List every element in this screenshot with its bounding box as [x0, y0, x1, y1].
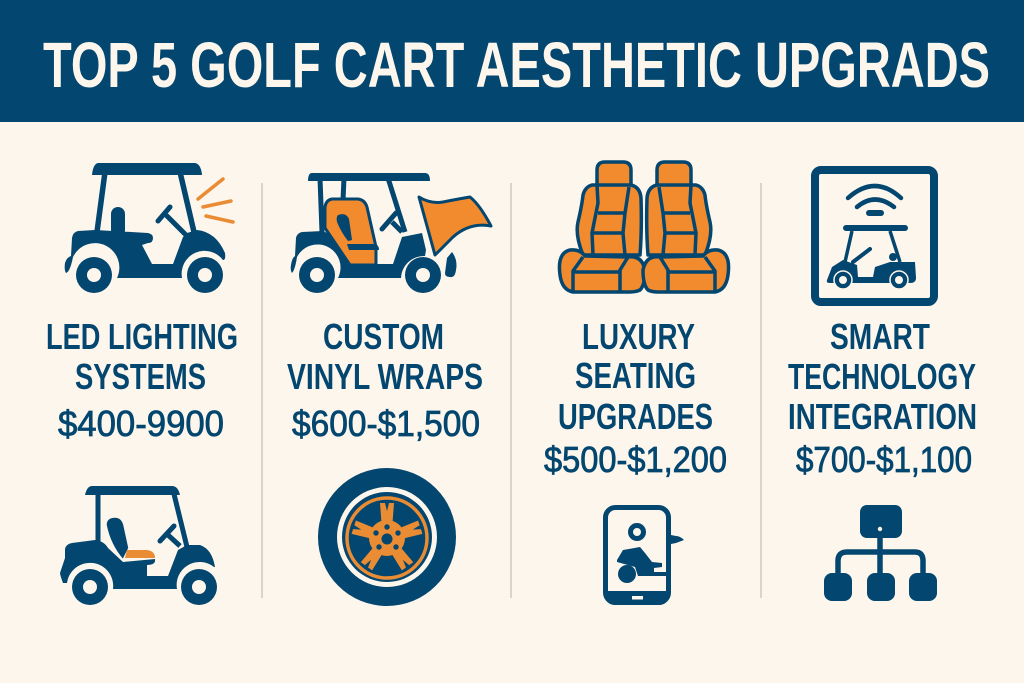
- price: smart technology: $700-$1,100: [796, 439, 972, 480]
- icon: luxury seats: [559, 162, 729, 292]
- left seat: [559, 162, 645, 292]
- label: LED lighting systems: SYSTEMS: [75, 356, 206, 397]
- vinyl sheet: [419, 197, 491, 255]
- price: vinyl wraps: $600-$1,500: [292, 403, 480, 444]
- label: smart technology integration: [788, 316, 977, 437]
- label: luxury seating upgrades: [558, 316, 713, 437]
- price: luxury seating: $500-$1,200: [544, 439, 727, 480]
- label: luxury seating upgrades: UPGRADES: [558, 396, 713, 437]
- label: LED lighting systems: [46, 316, 238, 397]
- icon: alloy wheel: [318, 468, 456, 606]
- label: custom vinyl wraps: CUSTOM: [323, 316, 444, 357]
- icon: cart with vinyl wrap: [291, 173, 491, 293]
- label: smart technology integration: SMART: [830, 316, 930, 357]
- right seat: [643, 162, 729, 292]
- icon: golf cart with orange seat: [60, 486, 217, 605]
- icon: golf cart with LED light rays: [65, 163, 233, 293]
- price: LED lighting: $400-9900: [58, 403, 224, 444]
- label: luxury seating upgrades: LUXURY: [582, 316, 695, 357]
- header banner: [0, 0, 1024, 122]
- label: LED lighting systems: LED LIGHTING: [46, 316, 238, 357]
- label: custom vinyl wraps: [287, 316, 483, 397]
- icon: smart cart screen with wifi: [815, 170, 934, 302]
- icon: smartphone with cart: [606, 508, 684, 605]
- icon: network hierarchy: [824, 505, 937, 601]
- label: luxury seating upgrades: SEATING: [575, 355, 696, 396]
- label: custom vinyl wraps: VINYL WRAPS: [287, 356, 483, 397]
